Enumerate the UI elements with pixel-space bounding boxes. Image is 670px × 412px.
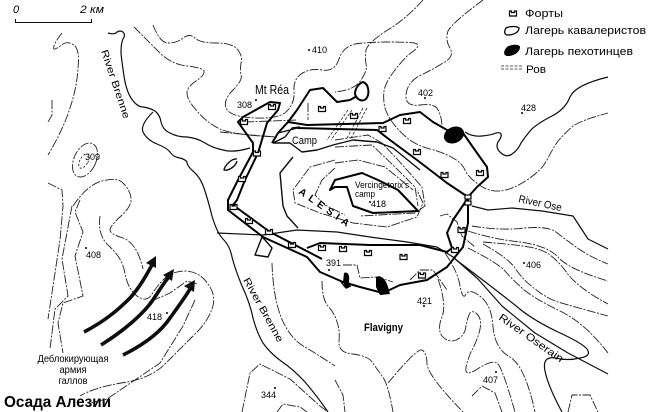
- spot heights: 410: [312, 45, 327, 55]
- river labels: [98, 48, 566, 365]
- arrows: relieving army: [84, 256, 195, 355]
- cavalry camps: [224, 82, 368, 287]
- legend: Форты: [525, 8, 563, 20]
- place labels: Flavigny: [364, 322, 404, 334]
- river labels: River Brenne: [240, 276, 285, 345]
- ditch: dashed double lines: [327, 108, 367, 140]
- place labels: camp: [355, 189, 375, 199]
- spot heights: 344: [261, 390, 276, 400]
- spot heights: 407: [483, 375, 498, 385]
- legend: Лагерь кавалеристов: [525, 25, 646, 37]
- plateau and Vercingetorix camp outline: [280, 157, 418, 228]
- spot heights: 428: [521, 103, 536, 113]
- label: relieving Gallic army: [38, 353, 108, 387]
- place labels: Vercingetorix's: [355, 180, 409, 190]
- label: relieving Gallic army: армия: [60, 365, 86, 376]
- rivers: [108, 31, 608, 412]
- spot heights: 408: [86, 250, 101, 260]
- scale bar: 0: [13, 4, 20, 16]
- place labels: Camp: [292, 135, 317, 147]
- label: relieving Gallic army: галлов: [58, 376, 88, 387]
- spot heights: 421: [417, 296, 432, 306]
- river labels: River Ose: [517, 193, 563, 214]
- legend: [501, 8, 646, 76]
- scale bar: 2 км: [79, 4, 104, 16]
- spot heights: 406: [526, 260, 541, 270]
- spot heights: 402: [418, 88, 433, 98]
- label: relieving Gallic army: Деблокирующая: [38, 353, 108, 365]
- place labels: Mt Réa: [255, 82, 290, 97]
- forts: [230, 104, 484, 278]
- spot heights: 309: [85, 152, 100, 162]
- title: Осада Алезии: [4, 394, 111, 411]
- spot heights: [85, 45, 541, 400]
- river labels: River Brenne: [98, 48, 132, 121]
- siege lines: [228, 88, 488, 293]
- spot heights: 418: [147, 312, 162, 322]
- spot heights: 391: [326, 258, 341, 268]
- legend: Лагерь пехотинцев: [525, 46, 633, 58]
- spot heights: 308: [237, 100, 252, 110]
- river labels: River Oserain: [496, 312, 566, 365]
- scale bar: [13, 4, 104, 22]
- spot heights: 418: [371, 199, 386, 209]
- place labels: [255, 82, 409, 334]
- infantry camps: [343, 123, 467, 295]
- legend: Ров: [526, 64, 546, 76]
- place labels: ALESIA: [296, 186, 355, 232]
